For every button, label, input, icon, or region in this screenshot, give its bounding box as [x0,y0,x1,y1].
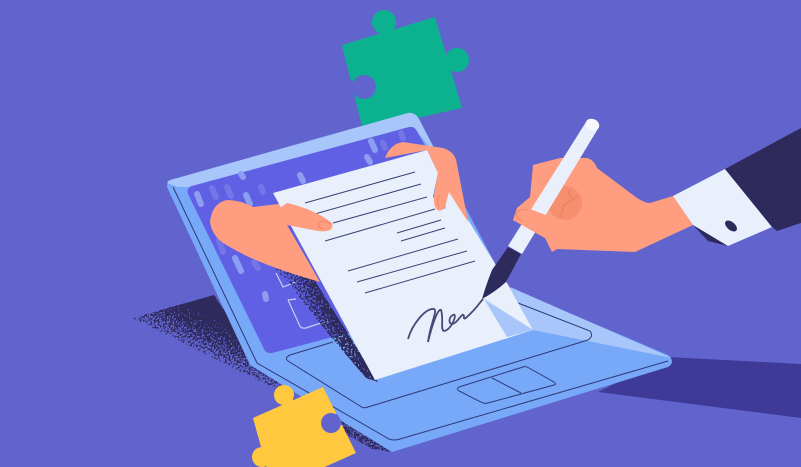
screen display [188,127,510,353]
top hand [385,142,468,222]
stippled shadow beside paper [268,262,378,382]
paper fold [484,299,533,337]
left hand thumb over paper [270,203,333,231]
paper document [273,150,533,380]
shirt cuff [673,169,772,246]
screen top bezel [167,113,440,187]
stippled shadow under base [330,410,392,452]
pen [482,117,601,299]
stippled left shadow [132,295,300,402]
writing hand [513,158,693,252]
signature [408,299,483,342]
thumb over pen [513,207,570,240]
right laptop shadow [598,357,801,418]
laptop screen frame [167,113,530,365]
laptop outline lines [173,187,668,440]
document text lines [305,172,475,293]
cuff button [723,218,739,234]
screen stripes [197,141,375,299]
laptop base [250,288,672,452]
palm shade [548,186,582,220]
base light reflection [510,287,672,358]
laptop [167,113,672,452]
left thumb nail [318,221,332,229]
thumb nail [516,210,527,221]
touchpad [458,367,556,403]
screen outline icons [276,273,330,328]
top finger nail [438,195,440,207]
top hand finger over paper [434,155,468,222]
pen nib [482,247,521,299]
dark sleeve under cuff [693,225,728,246]
left hand behind paper [210,200,333,282]
icon: yellow puzzle piece [252,385,356,467]
faint screen stripes [212,133,403,268]
icon: green puzzle piece [342,10,469,130]
suit sleeve [725,128,801,231]
